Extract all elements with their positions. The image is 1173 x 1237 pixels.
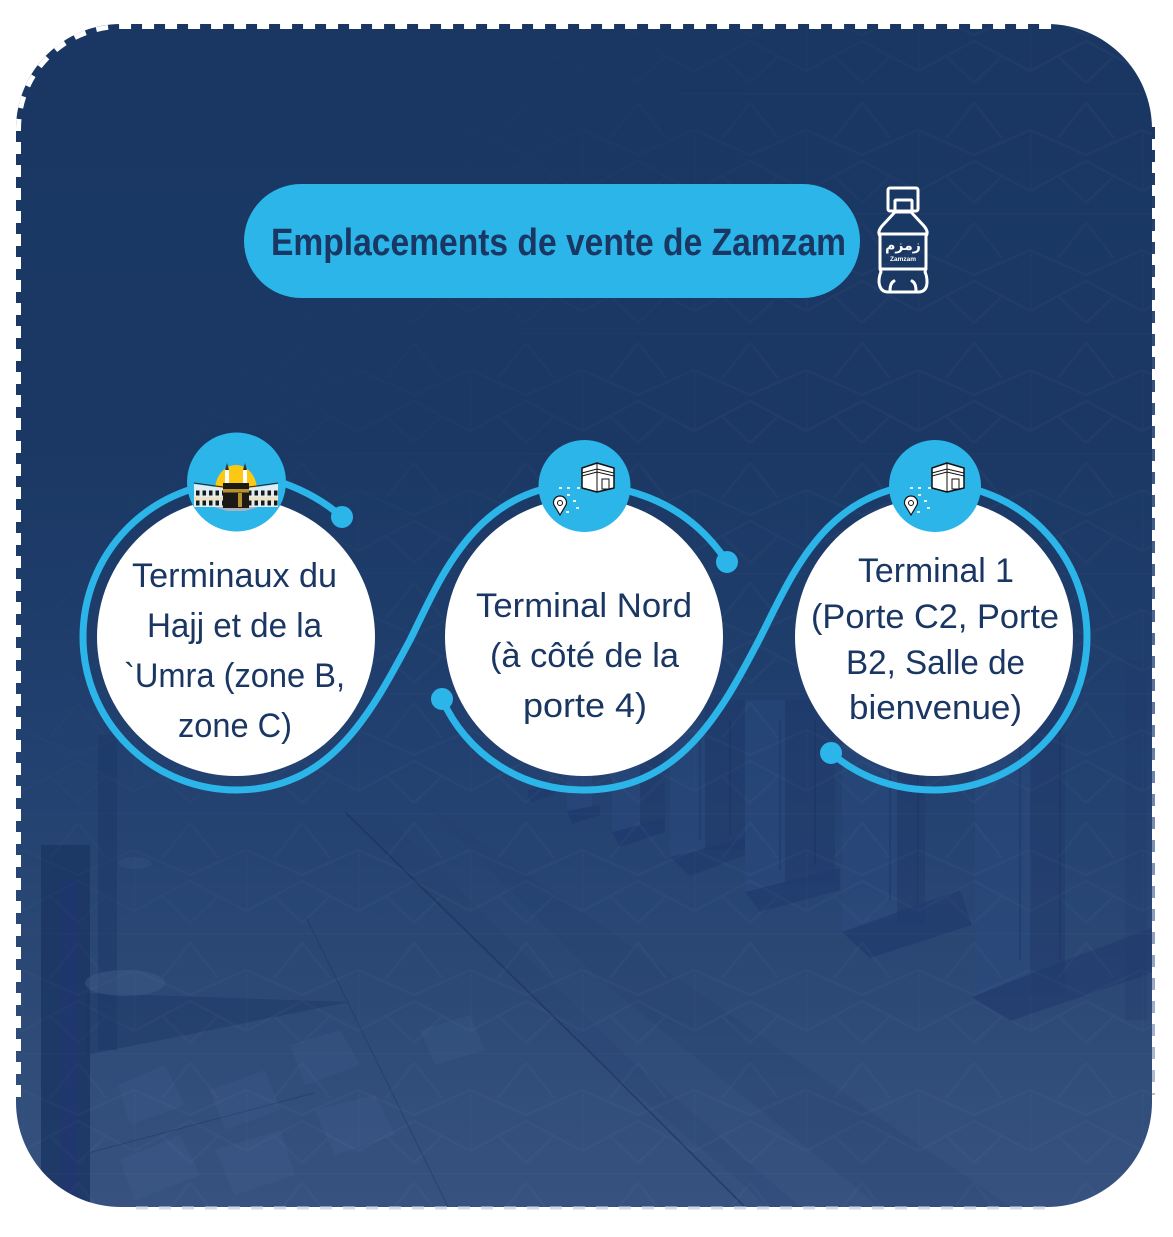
panel: Terminaux du Hajj — [97, 432, 375, 776]
text: Terminal 1 gates: Terminal 1 — [858, 552, 1014, 590]
text: terminals of Hajj and Umra: zone C) — [178, 707, 292, 745]
text: Terminal 1 gates — [811, 552, 1059, 727]
text: Terminal Nord — [476, 587, 692, 725]
text: terminals of Hajj and Umra: Terminaux du — [132, 557, 337, 595]
icon: Zamzam bottle: زمزم — [885, 238, 921, 254]
badge: mosque icon — [187, 432, 286, 532]
pillars: front faces — [567, 700, 1030, 995]
title text: Emplacements de vente de Zamzam — [271, 222, 846, 264]
text: terminals of Hajj and Umra — [124, 557, 345, 745]
panel: Terminal Nord — [445, 440, 723, 776]
title pill — [244, 184, 860, 298]
text: Terminal 1 gates: bienvenue) — [849, 689, 1022, 727]
text: Terminal 1 gates: (Porte C2, Porte — [811, 598, 1059, 636]
icon: Zamzam bottle: Zamzam — [890, 256, 916, 263]
badge: Kaaba and pin icon — [889, 440, 981, 532]
text: Terminal Nord: porte 4) — [523, 687, 647, 725]
photo: floor and stanchions — [41, 720, 1152, 1207]
icon: Zamzam bottle — [879, 188, 927, 292]
text: Terminal Nord: (à côté de la — [490, 637, 679, 675]
text: Terminal 1 gates: B2, Salle de — [846, 644, 1025, 682]
text: Terminal Nord: Terminal Nord — [476, 587, 692, 625]
connecting wave line with end dots — [83, 482, 1087, 790]
badge: Kaaba and pin icon — [538, 440, 630, 532]
pillars: bases — [628, 825, 1152, 1021]
text: terminals of Hajj and Umra: `Umra (zone B, — [124, 657, 345, 695]
text: terminals of Hajj and Umra: Hajj et de la — [147, 607, 322, 645]
pillars: side faces — [640, 660, 1147, 1020]
panel: Terminal 1 — [795, 440, 1073, 776]
